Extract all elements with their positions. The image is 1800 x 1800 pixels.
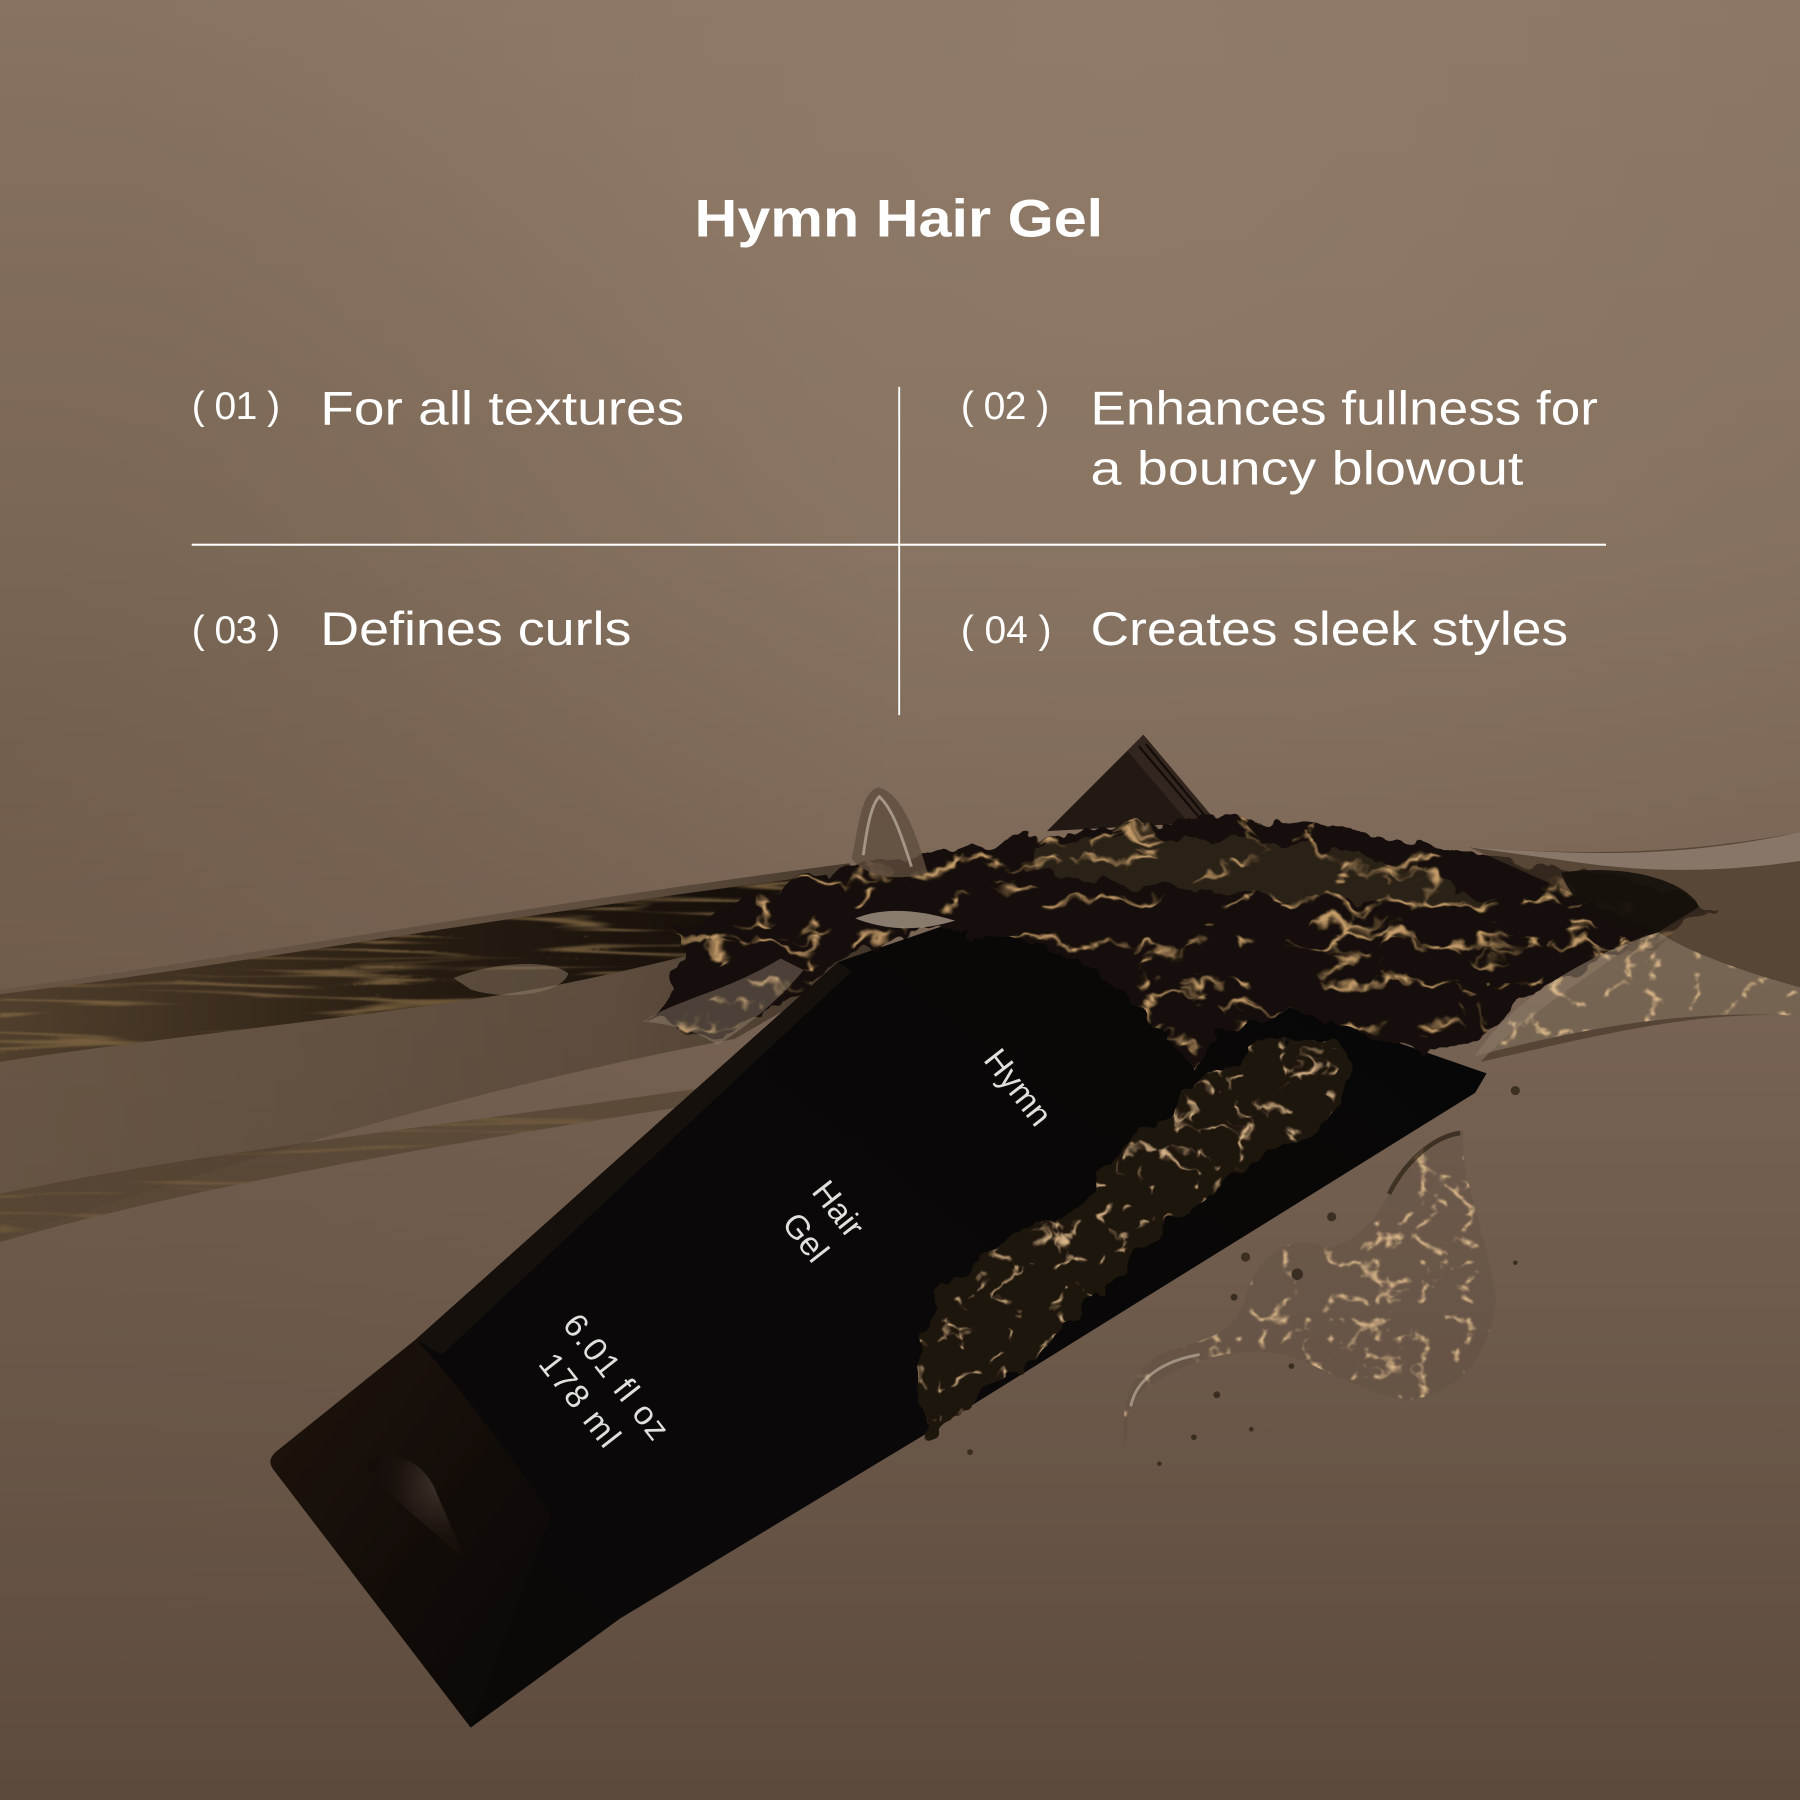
tube label: Hair Gel xyxy=(774,1174,871,1270)
tube label: volume: 6.01 fl oz xyxy=(555,1307,676,1447)
tube body xyxy=(270,907,1487,1728)
title: Hymn Hair Gel xyxy=(695,189,1103,248)
tube cap xyxy=(270,1340,551,1728)
feature 03: ( 03 ) xyxy=(192,609,280,652)
feature 03 xyxy=(192,602,631,655)
feature 02: a bouncy blowout xyxy=(1091,441,1523,494)
feature grid xyxy=(192,382,1606,715)
feature 02: ( 02 ) xyxy=(961,385,1049,428)
feature 01 xyxy=(192,382,684,435)
feature 04: Creates sleek styles xyxy=(1091,602,1568,655)
tube label: Hair Gel: Gel xyxy=(774,1206,835,1270)
feature 02 xyxy=(961,382,1598,494)
tube label: Hair Gel: Hair xyxy=(804,1174,871,1245)
tube label: volume: 178 ml xyxy=(531,1346,627,1455)
feature 04 xyxy=(961,602,1568,655)
feature 01: For all textures xyxy=(320,382,684,435)
tube label: Hymn: Hymn xyxy=(976,1042,1059,1133)
tube crimp above the water xyxy=(1047,735,1217,831)
pale fragments at left of splash xyxy=(643,959,804,1045)
splash over tube xyxy=(643,788,1710,1435)
feature 04: ( 04 ) xyxy=(961,609,1052,652)
feature 03: Defines curls xyxy=(320,602,631,655)
water crest droplet xyxy=(852,788,928,877)
feature 01: ( 01 ) xyxy=(192,385,280,428)
diagonal gel stream xyxy=(918,1036,1348,1435)
pale reflection at crest xyxy=(855,911,955,928)
left water band xyxy=(0,863,884,1242)
feature 02: Enhances fullness for xyxy=(1091,382,1598,435)
right water band xyxy=(1469,832,1800,1062)
flying splash and droplets xyxy=(967,1086,1520,1466)
main splash crest xyxy=(649,817,1710,1068)
